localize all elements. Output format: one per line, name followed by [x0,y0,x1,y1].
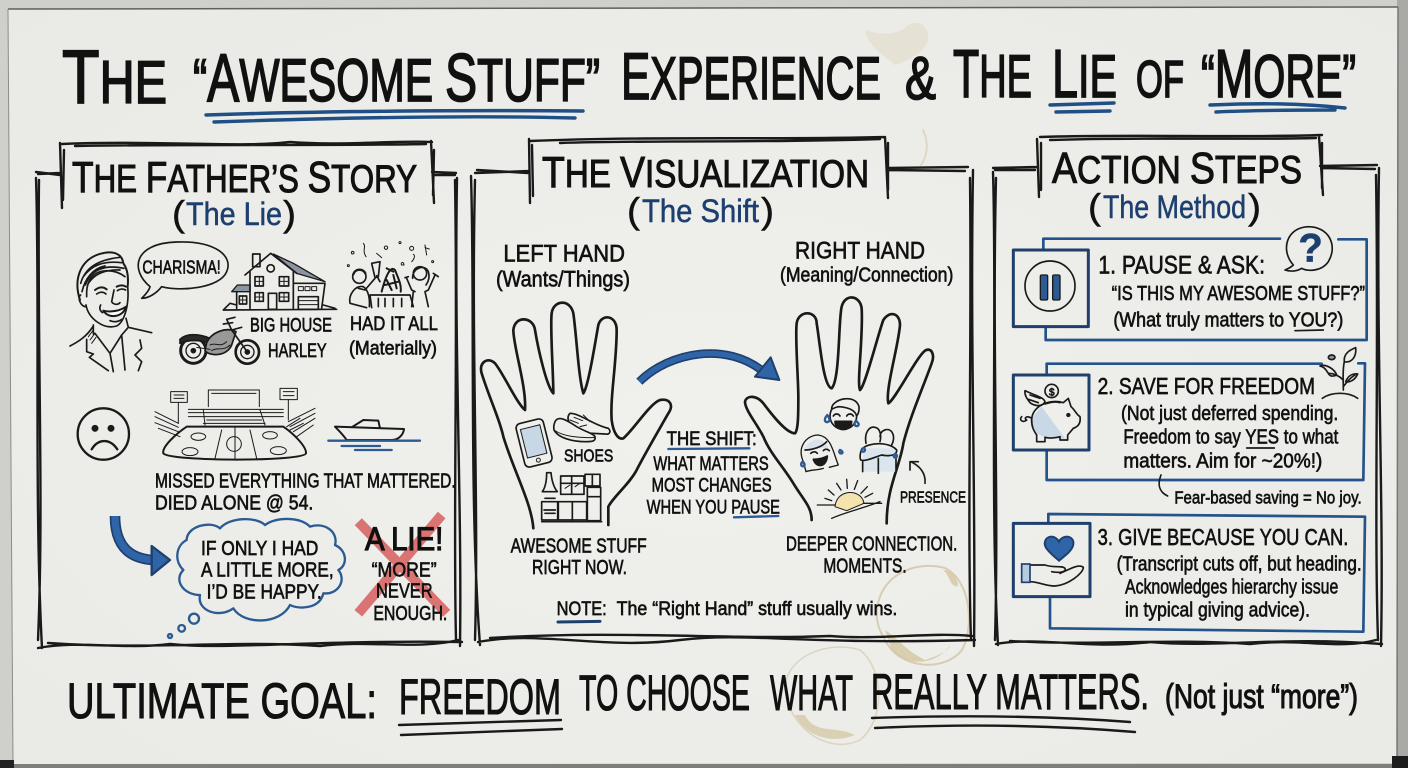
text: the shift: WHEN YOU PAUSE [647,497,780,518]
title: “AWESOME STUFF” [193,40,600,116]
right hand outline [745,297,933,523]
bottom goal line: FREEDOM [399,669,561,725]
step 3 text: 3. GIVE BECAUSE YOU CAN. [1098,524,1348,550]
label: deeper connection moments: DEEPER CONNECTION. [786,534,957,556]
step 2 text: (Not just deferred spending. [1121,402,1338,425]
text: the shift: WHAT MATTERS [653,454,769,475]
thought cloud: IF ONLY I HAD [201,538,318,560]
step 2 text [1098,373,1339,472]
label: presence with arrow: PRESENCE [900,490,966,507]
panel heading: ACTION STEPS [1052,144,1302,193]
bottom goal line: REALLY MATTERS. [871,664,1149,720]
bottom goal line: WHAT [770,665,853,721]
coffee stains [785,23,969,744]
panel subheading: ( [1088,186,1101,227]
diagram: two hands [481,237,966,622]
text: the shift [647,429,780,518]
panel: the father's story [36,141,462,648]
title: & [905,45,936,112]
icon: sunrise [817,479,882,518]
step 3 text: Acknowledges hierarchy issue [1125,576,1338,598]
step 3 box [1048,514,1365,632]
step 2 box [1047,363,1365,480]
panel heading: THE FATHER’S STORY [72,153,417,202]
callout: a lie crossed out: “MORE” [372,560,437,582]
right hand heading: (Meaning/Connection) [780,264,953,287]
illustrations: father's story [70,242,456,638]
title: THE [62,35,167,120]
step 3 text: in typical giving advice). [1125,600,1310,622]
icon: party [347,242,438,308]
icon: phone [515,418,553,468]
icon: boat [328,420,420,450]
right hand heading: RIGHT HAND [795,237,925,264]
label: big house and harley: HARLEY [268,341,327,362]
text: missed everything: MISSED EVERYTHING THAT MATTERED. [155,470,456,492]
panel: the visualization [471,137,975,646]
label: big house and harley: BIG HOUSE [250,316,332,337]
icon: shoes [554,413,610,442]
icon: question bubble: ? [1298,227,1323,271]
icon: embracing couple [860,427,897,473]
icon: heart in hand [1013,523,1090,597]
label: big house and harley [250,316,332,362]
panel border: father's story [36,141,462,648]
step 1: pause and ask [1013,227,1367,340]
title [62,35,1356,122]
bottom goal line [67,664,1358,735]
label: deeper connection moments: MOMENTS. [823,556,907,578]
panel subheading: ) [1248,186,1261,227]
icon: sad face [78,408,129,460]
step 1 text: 1. PAUSE & ASK: [1098,251,1265,279]
text: the shift: THE SHIFT: [667,429,757,450]
panel subheading: The Method [1103,189,1246,225]
step 1 box [1043,239,1367,340]
left hand heading [496,241,630,292]
step 3 text: (Transcript cuts off, but heading. [1117,554,1362,576]
bottom goal line: ULTIMATE GOAL: [67,673,377,729]
panel heading: THE VISUALIZATION [542,148,869,197]
step 2 text: Freedom to say YES to what [1123,425,1339,448]
icon: hockey stadium [155,388,315,460]
thought cloud: A LITTLE MORE, [201,560,334,582]
icon: piggy bank [1013,375,1089,450]
left hand outline [481,303,671,528]
right hand heading [780,237,953,287]
speech bubble: charisma: CHARISMA! [142,256,221,277]
label: awesome stuff right now: AWESOME STUFF [511,536,647,558]
callout: a lie crossed out: ENOUGH. [373,603,447,625]
panel border: action steps [993,135,1382,646]
panel subheading: ) [283,193,296,234]
step 2 text: matters. Aim for ~20%!) [1123,449,1322,472]
step 2 text: 2. SAVE FOR FREEDOM [1098,373,1315,399]
note: NOTE: [557,599,607,620]
callout: a lie crossed out: NEVER [376,580,433,602]
panel subheading: ) [761,190,774,231]
step 3 text [1098,524,1362,622]
label: awesome stuff right now: RIGHT NOW. [532,557,627,579]
icon: piggy bank: $ [1049,387,1055,398]
title: “MORE” [1201,36,1356,112]
panel border: visualization [471,137,975,646]
text: missed everything: DIED ALONE @ 54. [155,492,313,514]
callout: a lie crossed out [358,515,447,625]
bottom goal line: (Not just “more”) [1165,678,1358,716]
step 3: give because you can [1013,514,1365,632]
icon: motorcycle [180,317,259,364]
title: OF [1136,51,1184,109]
icon: kitchen [542,473,602,522]
note: fear-based saving [1159,475,1362,507]
left hand heading: (Wants/Things) [496,267,630,292]
text: the shift: MOST CHANGES [652,476,772,497]
panel subheading: The Lie [186,196,282,232]
title: EXPERIENCE [621,39,881,113]
speech bubble: charisma [138,242,228,298]
panel: action steps [993,135,1382,646]
arrow: to thought cloud [115,516,170,575]
thought cloud: I’D BE HAPPY. [207,581,322,603]
label: deeper connection moments [786,534,957,578]
icon: question bubble [1285,227,1332,271]
panel subheading: The Shift [642,193,759,229]
arrow: left to right hand [639,354,779,382]
label: had it all: (Materially) [349,338,437,359]
bottom goal line: TO CHOOSE [579,665,750,721]
label: shoes: SHOES [564,446,613,466]
label: had it all [349,314,438,359]
label: awesome stuff right now [511,536,647,579]
label: presence with arrow [900,462,966,507]
panel subheading: ( [627,190,640,231]
icon: pause [1013,250,1088,327]
icon: laughing man [825,399,859,430]
label: had it all: HAD IT ALL [350,314,438,335]
step 1 text: (What truly matters to YOU?) [1113,310,1343,332]
callout: a lie crossed out: A LIE! [365,521,443,557]
text: missed everything [155,470,456,514]
note: fear-based saving: Fear-based saving = No joy. [1174,487,1362,507]
icon: smiling man [70,252,152,372]
icon: big house [223,253,337,310]
panel subheading: ( [172,193,185,234]
left hand heading: LEFT HAND [503,241,625,268]
step 1 text [1098,251,1365,332]
icon: laughing woman [801,435,842,472]
title: THE [953,36,1032,112]
thought cloud [168,519,345,638]
title: LIE [1052,36,1117,112]
note: The “Right Hand” stuff usually wins. [617,599,897,620]
icon: sprout [1320,348,1358,398]
step 2: save for freedom [1013,348,1365,507]
